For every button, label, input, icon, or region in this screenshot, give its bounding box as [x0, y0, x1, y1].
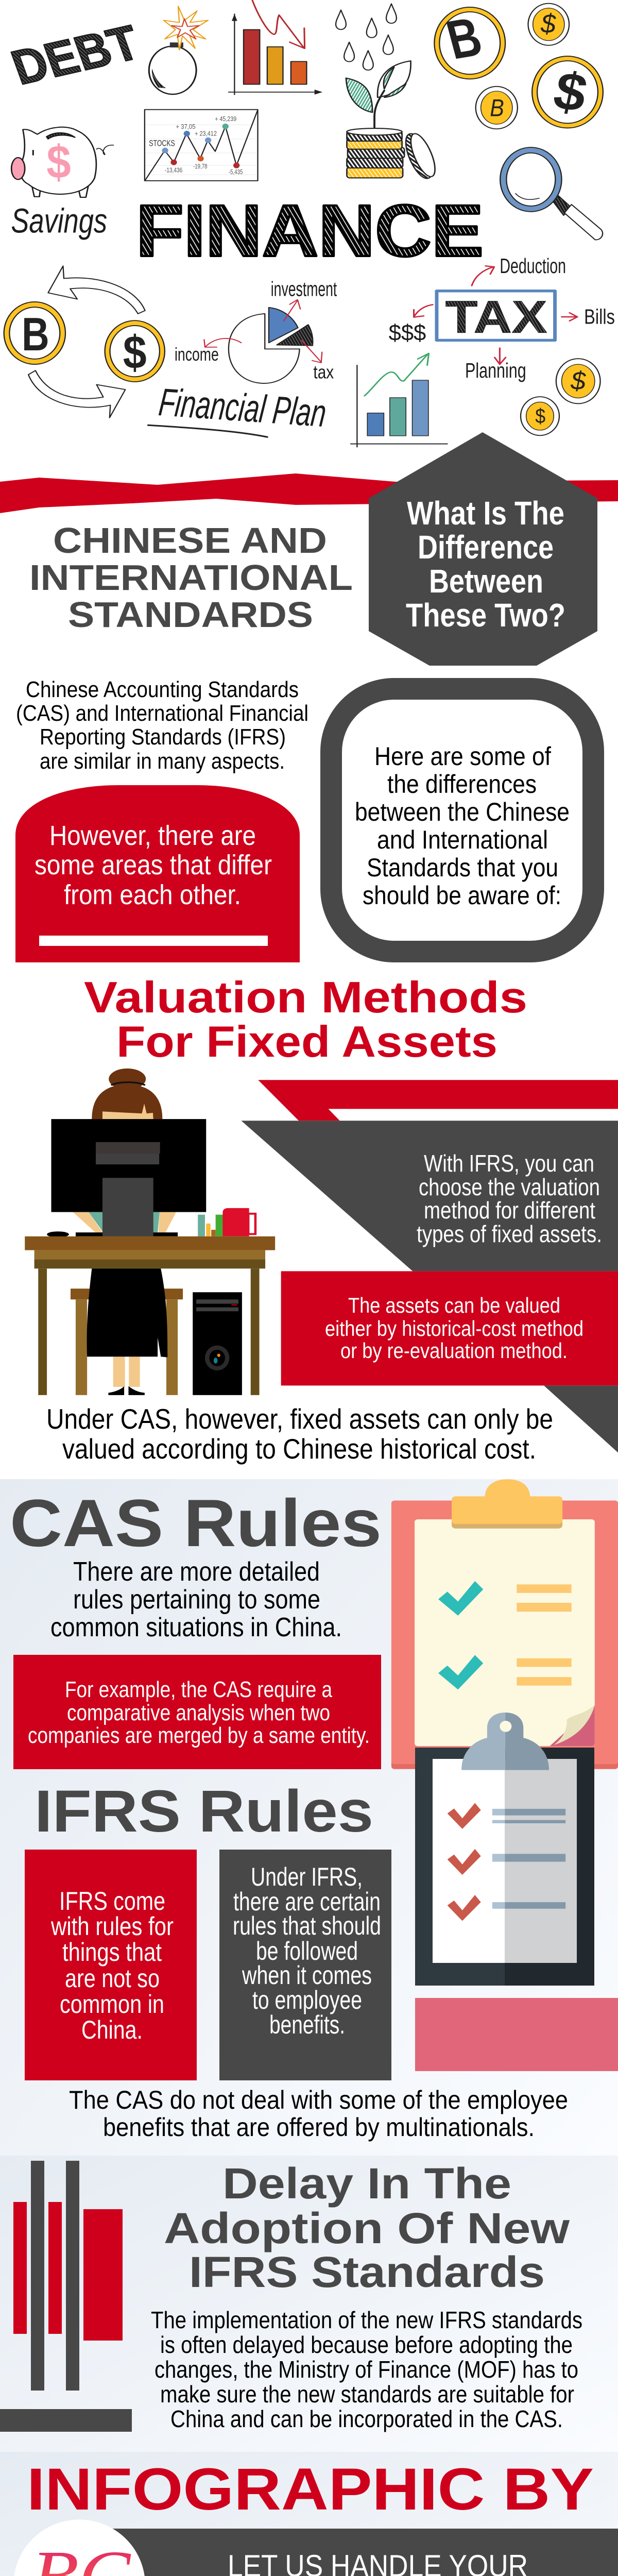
- heading: Infographic by: INFOGRAPHIC BY: [27, 2456, 594, 2522]
- icon: TAX box: $$$: [389, 320, 426, 345]
- icon: dollar coin: [532, 56, 603, 128]
- heading: Chinese and International Standards: CHINESE AND: [53, 520, 327, 561]
- heading: Chinese and International Standards: INTERNATIONAL: [29, 557, 353, 598]
- text: IFRS come: China.: [81, 2015, 143, 2044]
- text: under IFRS: when it comes: [242, 1961, 372, 1990]
- text block: under CAS: Under CAS, however, fixed assets can only be: [46, 1403, 553, 1435]
- text block: under CAS: [46, 1403, 553, 1465]
- decorative bars: [0, 2161, 132, 2432]
- heading: Delay: [164, 2159, 570, 2296]
- chart: pie with labels: [175, 277, 337, 383]
- icon: TAX box: TAX: [445, 292, 547, 343]
- icon: dollar coin: $: [548, 60, 593, 123]
- text: example: For example, the CAS require a: [65, 1677, 332, 1702]
- illustration: finance doodles: [4, 0, 615, 447]
- text: question: [406, 495, 565, 634]
- icon: piggy bank: $: [46, 135, 71, 188]
- text: example: comparative analysis when two: [67, 1700, 330, 1725]
- text block: detailed rules: There are more detailed: [73, 1557, 320, 1587]
- panel: gray call to action band: [103, 2529, 618, 2576]
- chart: stocks: STOCKS: [149, 139, 175, 148]
- heading: Valuation Methods: For Fixed Assets: [116, 1018, 497, 1066]
- text: differences: and International: [377, 825, 548, 854]
- chart: pie with labels: investment: [271, 277, 337, 300]
- text block: intro: [16, 677, 308, 774]
- shapes: valuation panels: [241, 1080, 618, 1452]
- text: under IFRS: there are certain: [233, 1887, 381, 1916]
- text block: intro: Chinese Accounting Standards: [26, 677, 299, 702]
- text block: detailed rules: [50, 1557, 342, 1642]
- text: however: some areas that differ: [35, 850, 272, 880]
- chart: pie with labels: tax: [313, 362, 334, 382]
- heading: Delay: IFRS Standards: [189, 2248, 545, 2296]
- panel: rounded differences box: [331, 689, 593, 952]
- heading: Delay: Delay In The: [222, 2159, 511, 2208]
- text: example: [28, 1677, 370, 1748]
- text: question: Difference: [418, 529, 554, 566]
- icon: small dollar coin: $: [540, 9, 556, 39]
- heading: Delay: Adoption Of New: [164, 2204, 570, 2252]
- icon: bitcoin coin: B: [440, 6, 488, 71]
- icon: dark clipboard: [415, 1713, 594, 1986]
- panel: gray IFRS box: [219, 1850, 391, 2080]
- decorative red brush band: [0, 473, 618, 513]
- text block: assets valued: The assets can be valued: [348, 1293, 560, 1317]
- text: however: However, there are: [49, 820, 256, 851]
- text: question: What Is The: [407, 495, 564, 532]
- text: Savings: Savings: [11, 202, 107, 240]
- text: under IFRS: rules that should: [233, 1911, 381, 1940]
- chart: falling bars: [229, 0, 322, 95]
- panel: rules background: [0, 1479, 618, 2156]
- text: Financial Plan: Financial Plan: [157, 381, 329, 435]
- icon: bomb: [149, 6, 208, 94]
- panel: question hexagon: [369, 432, 597, 666]
- chart: stocks: -5,435: [229, 168, 243, 176]
- icon: piggy bank: [11, 127, 113, 197]
- illustration: woman at desk: [25, 1069, 275, 1395]
- icon: metal clip: [448, 1713, 565, 1921]
- icon: small bitcoin coin: B: [490, 94, 504, 122]
- text block: assets valued: [325, 1293, 583, 1363]
- text block: detailed rules: common situations in China.: [50, 1613, 342, 1642]
- chart: pie with labels: income: [175, 344, 219, 365]
- icon: small dollar coin: [528, 4, 569, 45]
- text: IFRS come: [50, 1887, 174, 2044]
- text: differences: between the Chinese: [355, 798, 570, 826]
- icon: cycle arrows and coins: $: [123, 326, 147, 378]
- text block: intro: (CAS) and International Financial: [16, 701, 308, 726]
- text block: assets valued: or by re-evaluation method.: [340, 1338, 568, 1363]
- icon: cycle arrows and coins: B: [22, 308, 49, 360]
- text: differences: [355, 742, 570, 910]
- text: under IFRS: Under IFRS,: [251, 1862, 363, 1891]
- chart: stocks: + 23,412: [195, 130, 217, 138]
- text block: employee benefits: benefits that are offered by multinationals.: [103, 2113, 535, 2142]
- icon: TAX box: Deduction: [500, 254, 566, 278]
- text: under IFRS: benefits.: [269, 2010, 345, 2039]
- text: IFRS come: common in: [60, 1990, 164, 2019]
- text block: under CAS: valued according to Chinese historical cost.: [62, 1433, 536, 1465]
- text: differences: should be aware of:: [363, 881, 561, 910]
- heading: IFRS Rules: IFRS Rules: [35, 1778, 373, 1844]
- panel: pink box: [415, 1998, 618, 2071]
- heading: Valuation Methods: Valuation Methods: [84, 973, 527, 1022]
- icon: TAX box: Planning: [465, 359, 526, 382]
- icon: salmon clipboard: [391, 1479, 618, 1769]
- text: however: from each other.: [64, 879, 241, 910]
- text: under IFRS: to employee: [252, 1986, 362, 2014]
- text block: implementation: [151, 2307, 582, 2432]
- text block: detailed rules: rules pertaining to some: [73, 1585, 320, 1615]
- chart: rising bars: [351, 353, 448, 447]
- text: IFRS come: things that: [62, 1938, 162, 1967]
- heading: Chinese and International Standards: STANDARDS: [68, 595, 313, 635]
- text: FINANCE: FINANCE: [136, 190, 484, 272]
- text block: employee benefits: The CAS do not deal with some of the employee: [69, 2086, 568, 2114]
- icon: small bitcoin coin: [476, 87, 518, 129]
- chart: stocks: [145, 110, 258, 181]
- text: differences: Here are some of: [374, 742, 551, 771]
- text: under IFRS: be followed: [256, 1937, 358, 1965]
- text: differences: the differences: [387, 770, 537, 799]
- heading: Valuation Methods: [84, 973, 527, 1066]
- panel: red however box: [15, 785, 300, 962]
- panel: delay background: [0, 2156, 618, 2452]
- chart: stocks: + 37,05: [176, 123, 196, 131]
- icon: lower coins: $: [535, 404, 545, 428]
- logo: Business China: [13, 2519, 145, 2576]
- icon: TAX box: [389, 254, 615, 382]
- icon: plant on coins: [346, 61, 440, 181]
- panel: credits background: [0, 2452, 618, 2576]
- text: IFRS come: are not so: [65, 1964, 160, 1993]
- panel: red IFRS box: [25, 1850, 197, 2080]
- heading: CAS Rules: CAS Rules: [10, 1485, 382, 1561]
- heading: Chinese and International Standards: [29, 520, 353, 635]
- icon: magnifier: [500, 147, 603, 240]
- text: IFRS come: with rules for: [50, 1912, 174, 1941]
- icon: cycle arrows and coins: [4, 266, 165, 418]
- text block: implementation: China and can be incorporated in the CAS.: [170, 2405, 563, 2432]
- text block: employee benefits: [69, 2086, 568, 2142]
- text: question: Between: [429, 563, 543, 600]
- text block: assets valued: either by historical-cost method: [325, 1316, 583, 1341]
- icon: lower coins: $: [570, 366, 587, 395]
- text block: with IFRS: [417, 1150, 602, 1247]
- text: DEBT: DEBT: [5, 15, 146, 95]
- chart: stocks: -19,78: [193, 163, 208, 171]
- icon: lower coins: [521, 359, 600, 435]
- text: question: These Two?: [406, 597, 565, 634]
- panel: red example box: [13, 1655, 381, 1769]
- icon: water drops: [336, 4, 397, 70]
- text block: intro: are similar in many aspects.: [40, 749, 285, 774]
- text: example: companies are merged by a same entity.: [28, 1723, 370, 1748]
- text: differences: Standards that you: [367, 853, 558, 882]
- text: Financial Plan: [148, 381, 329, 437]
- text block: intro: Reporting Standards (IFRS): [40, 724, 286, 750]
- chart: stocks: -13,436: [165, 166, 182, 174]
- chart: stocks: + 45,239: [215, 115, 236, 123]
- text: under IFRS: [233, 1862, 381, 2039]
- text: IFRS come: IFRS come: [59, 1887, 165, 1916]
- text: however: [35, 820, 272, 910]
